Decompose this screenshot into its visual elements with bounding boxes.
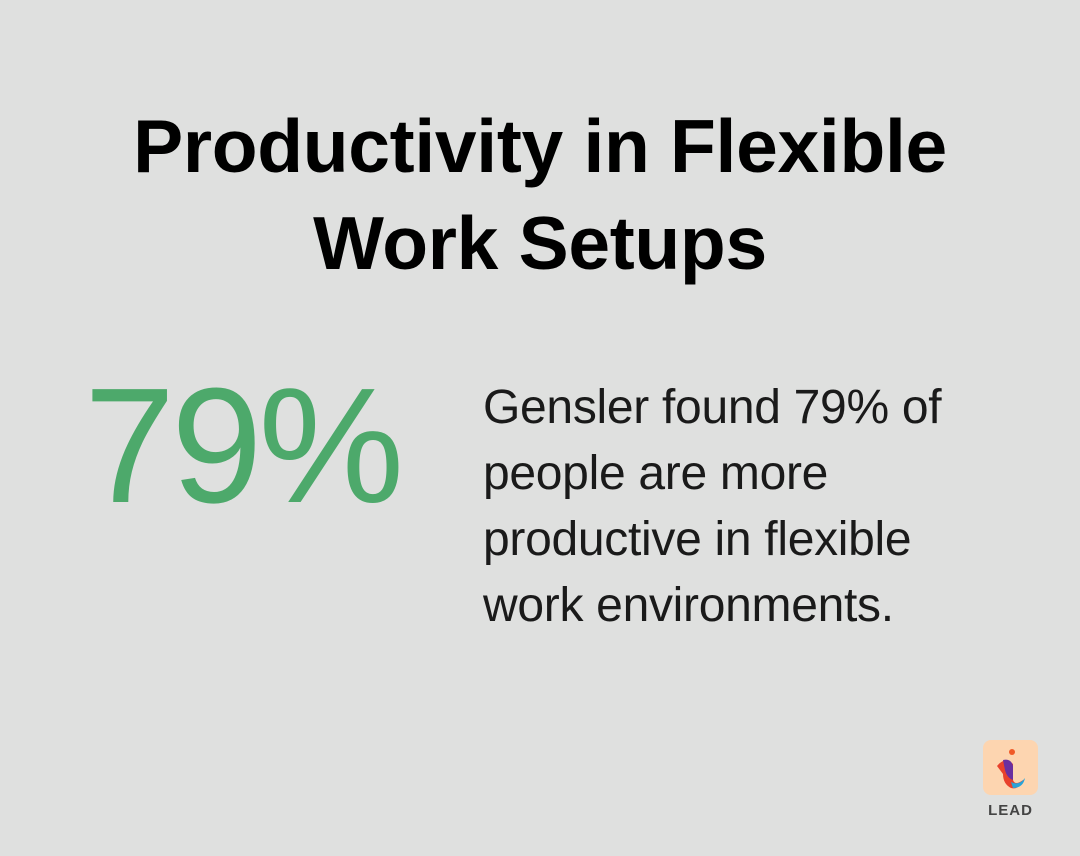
title: Productivity in Flexible bbox=[133, 104, 947, 188]
big stat: 79% bbox=[84, 354, 400, 537]
logo text: LEAD bbox=[988, 802, 1033, 819]
description text bbox=[483, 381, 942, 632]
description text: people are more bbox=[483, 447, 828, 500]
title bbox=[133, 104, 947, 285]
description text: Gensler found 79% of bbox=[483, 381, 941, 434]
icon: logo mark bbox=[983, 740, 1038, 795]
logo bbox=[983, 740, 1038, 819]
description text: productive in flexible bbox=[483, 513, 911, 566]
description text: work environments. bbox=[483, 579, 894, 632]
title: Work Setups bbox=[313, 201, 767, 285]
